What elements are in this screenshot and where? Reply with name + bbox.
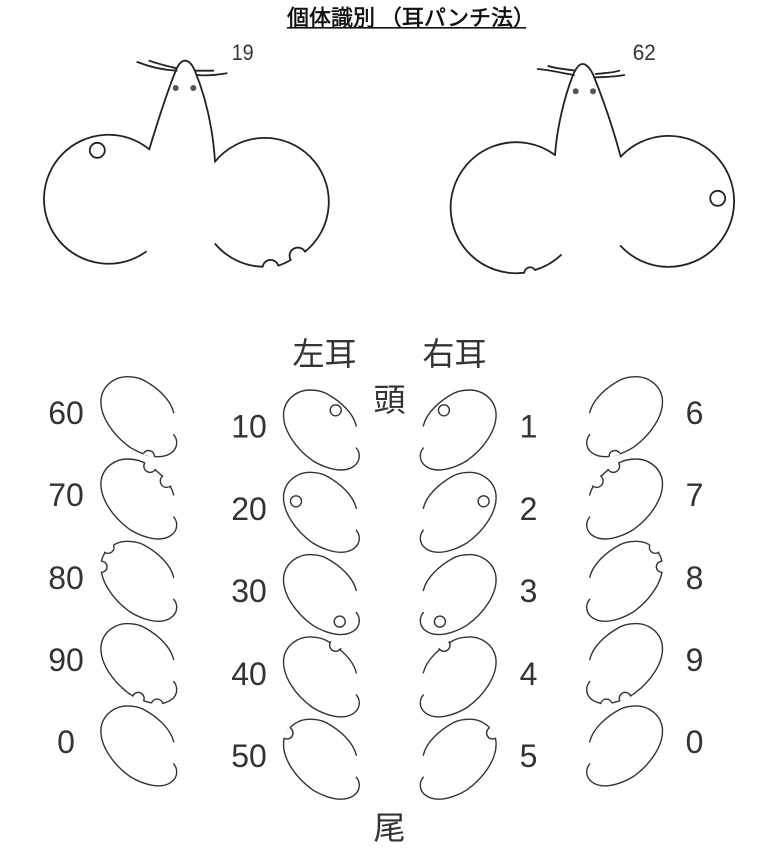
ear 30 — [284, 555, 359, 635]
column labels: ones outer: 9 — [686, 642, 703, 678]
ear 6 — [587, 377, 662, 457]
column labels: tens inner: 30 — [231, 573, 267, 609]
label: head: 頭 — [373, 375, 406, 421]
heading: left ear: 左耳 — [292, 329, 357, 375]
ear 2 — [420, 472, 496, 552]
column labels: ones inner: 1 — [520, 408, 537, 444]
ear 5 — [420, 719, 496, 799]
column labels: ones inner: 4 — [520, 656, 537, 692]
ear 8 — [587, 541, 662, 621]
mouse example 62: 62 — [633, 40, 656, 65]
column labels: tens inner: 40 — [231, 656, 267, 692]
column labels: ones outer: 7 — [686, 477, 703, 513]
column labels: ones inner: 5 — [520, 738, 537, 774]
column labels: tens inner — [231, 408, 267, 774]
ear 20 — [284, 472, 359, 552]
column labels: tens outer: 0 — [57, 724, 75, 760]
column labels: ones outer: 0 — [686, 724, 703, 760]
column labels: tens inner: 50 — [231, 738, 267, 774]
column labels: tens outer: 60 — [48, 395, 84, 431]
ear 4 — [420, 637, 496, 717]
title: 個体識別 （耳パンチ法） — [287, 0, 535, 32]
ear 0 left — [101, 706, 177, 786]
column labels: ones inner — [520, 408, 537, 774]
ear 0 right — [587, 706, 662, 786]
column labels: ones inner: 2 — [520, 491, 537, 527]
column labels: ones outer: 8 — [686, 560, 703, 596]
mouse example 62 — [451, 40, 734, 273]
column labels: ones outer: 6 — [686, 395, 703, 431]
ear 1 — [420, 390, 496, 470]
mouse example 19: 19 — [232, 40, 254, 65]
ear 50 — [284, 719, 359, 799]
ear 80 — [101, 541, 177, 621]
ear 7 — [587, 459, 662, 539]
heading: right ear: 右耳 — [422, 329, 487, 375]
column labels: ones outer — [686, 395, 703, 760]
ear 3 — [420, 555, 496, 635]
ear 90 — [101, 624, 177, 704]
ear 70 — [101, 459, 177, 539]
ear 10 — [284, 390, 359, 470]
column labels: tens outer — [48, 395, 84, 760]
column labels: tens outer: 90 — [48, 642, 84, 678]
ear 9 — [587, 624, 662, 704]
column labels: tens inner: 20 — [231, 491, 267, 527]
label: tail: 尾 — [373, 803, 406, 849]
column labels: tens outer: 70 — [48, 477, 84, 513]
ear 40 — [284, 637, 359, 717]
column labels: tens inner: 10 — [231, 408, 267, 444]
column labels: tens outer: 80 — [48, 560, 84, 596]
ear 60 — [101, 377, 177, 457]
mouse example 19 — [44, 40, 329, 267]
column labels: ones inner: 3 — [520, 573, 537, 609]
